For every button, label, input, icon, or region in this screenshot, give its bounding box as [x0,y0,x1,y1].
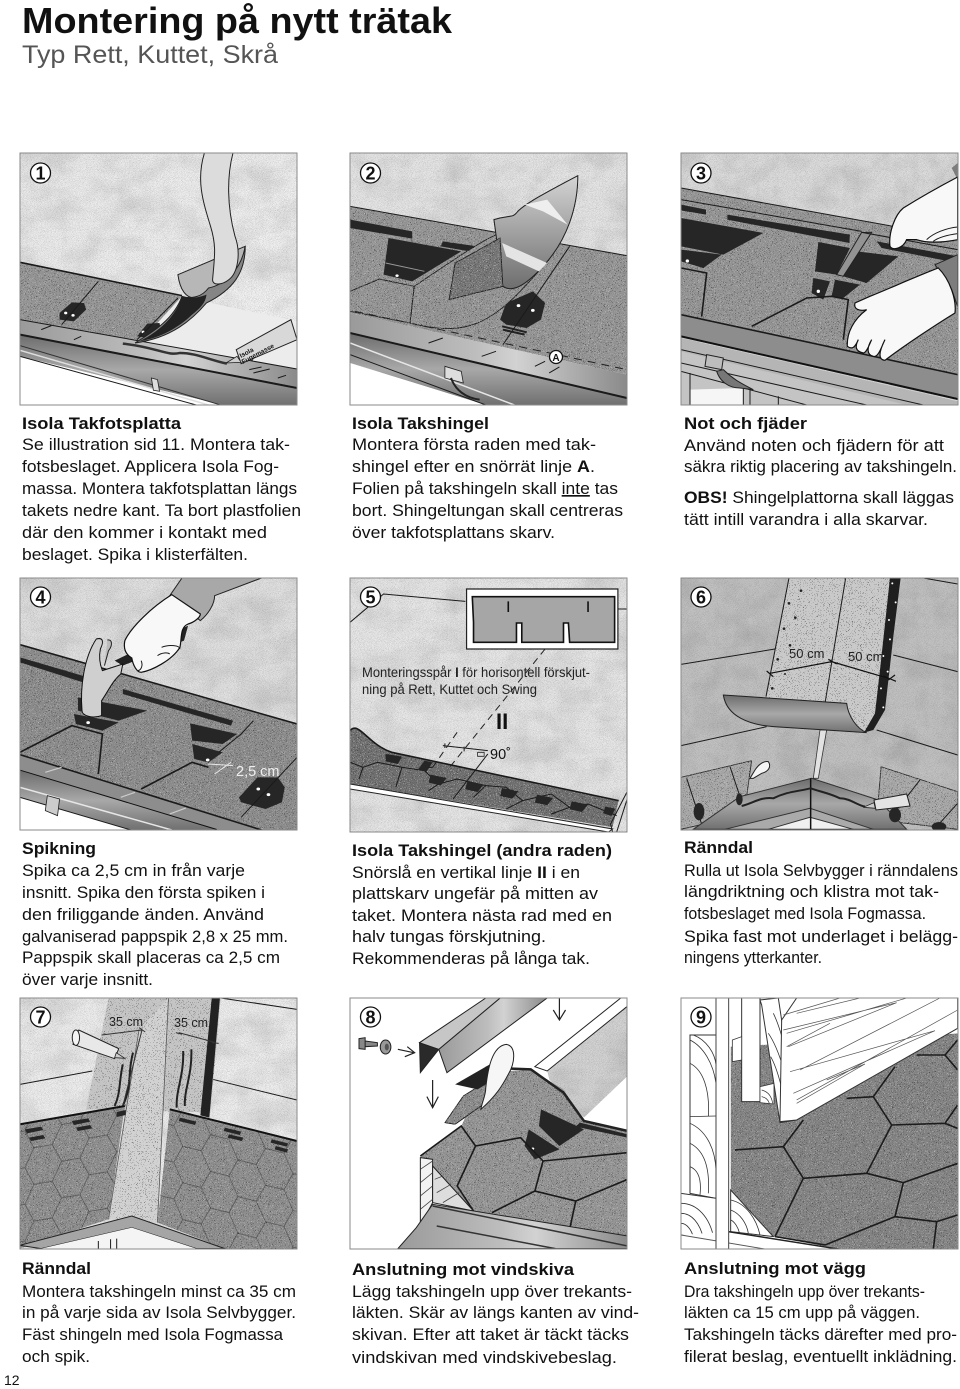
angle 90 degrees: 90˚ [490,747,511,763]
step number 5 [360,587,380,608]
chalk lines [433,649,545,771]
drip edge [20,320,297,388]
measurement: 50 cm right: 50 cm [848,649,883,664]
text: anslutning mot vindskiva: vindskivan med vindskivebeslag. [352,1348,617,1367]
lower shingles right [877,767,958,829]
hexagon shingles left [20,1106,125,1249]
wall plane and board [547,1006,628,1118]
eave flashing [693,778,907,829]
text: anslutning mot vägg: Dra takshingeln upp över trekants- [684,1282,925,1301]
hammer head [82,639,123,717]
step number 6: 6 [696,588,706,608]
text: anslutning mot vägg: Takshingeln täcks därefter med pro- [684,1325,957,1344]
text: anslutning mot vindskiva [352,1260,639,1367]
text: isola takfotsplatta: Se illustration sid 11. Montera tak- [22,435,290,454]
text: spikning: över varje insnitt. [22,970,153,989]
measure mark [208,762,233,774]
plastic film strip [201,153,238,284]
text: ränndal rulla ut: längdriktning och klistra mot tak- [684,882,939,901]
text: not och fjäder: säkra riktig placering av takshingeln. [684,457,957,476]
panel 7: ränndal shingel illustration [20,998,297,1249]
text: isola takfotsplatta: beslaget. Spika i klisterfälten. [22,545,248,564]
text: anslutning mot vindskiva: Anslutning mot vindskiva [352,1260,575,1279]
text: isola takfotsplatta: Isola Takfotsplatta [22,414,182,433]
lower hand [847,268,955,360]
text: ränndal rulla ut: Rulla ut Isola Selvbygger i ränndalens [684,861,958,880]
text: ränndal montera: och spik. [22,1347,90,1366]
text: isola takshingel: shingel efter en snörrät linje A. [352,457,595,476]
step number 9: 9 [696,1008,706,1028]
panel 1: isola takfotsplatta illustration: Isola [239,346,255,360]
valley [109,998,169,1223]
text: isola takfotsplatta [22,414,301,564]
text: spikning: insnitt. Spika den första spiken i [22,883,265,902]
gutter and wall [681,338,958,405]
sleeve [935,255,958,306]
arrows [398,998,566,1108]
text: isola takshingel [352,414,623,542]
screw and washer [359,1038,377,1049]
hammer handle [115,626,188,666]
panel 6: ränndal illustration [681,578,958,831]
half-pipe valley sheet [723,695,867,733]
tube of fogmassa [236,320,297,364]
text: anslutning mot vägg: läkten ca 15 cm upp på väggen. [684,1303,920,1322]
text: anslutning mot vindskiva: skivan. Efter att taket är täckt täcks [352,1325,629,1344]
text: isola takshingel andra raden [352,841,612,968]
panel 5: andra raden illustration [350,578,628,832]
text: isola takshingel: Montera första raden med tak- [352,435,596,454]
large plank [780,998,958,1122]
shingle tabs [694,803,704,820]
eave flashing [20,1216,225,1249]
step number 4: 4 [35,588,46,608]
roof shingles [20,645,297,830]
glue tube [73,1030,119,1059]
text: isola takshingel andra raden: Isola Takshingel (andra raden) [352,841,612,860]
panel 1: isola takfotsplatta illustration [20,153,297,405]
text: anslutning mot vägg [684,1259,957,1366]
text: isola takshingel: Isola Takshingel [352,414,489,433]
hexagon shingles right [157,1109,297,1249]
text: anslutning mot vindskiva: läkten. Skär av längs kanten av vind- [352,1303,639,1322]
measurement: 50 cm left: 50 cm [789,646,824,661]
slot marks on shingles [386,754,615,816]
panel 3: not och fjäder illustration [681,153,958,405]
step number 6 [691,587,711,608]
title [22,0,453,69]
text: isola takshingel: bort. Shingeltungan skall centreras [352,501,623,520]
step number 4 [30,587,50,608]
callout: monteringsspår: Monteringsspår I för horisontell förskjut- [362,664,590,680]
shingle body [420,1069,628,1249]
text: isola takshingel: över takfotsplattans skarv. [352,523,555,542]
lower shingles left [681,761,752,829]
shingle tab with knife hand [445,1079,490,1124]
text: ränndal montera: Ränndal [22,1259,91,1278]
curled plate [178,246,245,298]
measurement lines [767,659,896,681]
text: isola takshingel andra raden: plattskarv ungefär på mitten av [352,884,599,903]
exposed tab [500,291,545,328]
text: anslutning mot vindskiva: Lägg takshingeln upp över trekants- [352,1282,632,1301]
drip edge and gutter [350,313,627,400]
marker A: A [552,353,560,364]
text: ränndal rulla ut: fotsbeslaget med Isola Fogmassa. [684,904,926,923]
text: ränndal rulla ut: Ränndal [684,838,753,857]
step number 8 [360,1007,380,1028]
underlay strip [86,998,221,1113]
trowel [750,762,770,778]
bottom shingle rows [350,728,619,827]
drip edge and gutter [20,755,262,830]
text: anslutning mot vägg: Anslutning mot vägg [684,1259,866,1278]
vertical board [716,998,729,1250]
text: isola takshingel andra raden: Rekommenderas på långa tak. [352,949,590,968]
panel 1: isola takfotsplatta illustration: Fugemasse [241,343,276,366]
peeled shingle [410,176,578,329]
step number 1 [30,163,50,184]
drip edge [681,315,958,398]
corner wedge [731,1190,773,1237]
text: spikning: Spikning [22,839,96,858]
step number 5: 5 [365,588,376,608]
text: not och fjäder: tätt intill varandra i alla skarvar. [684,510,928,529]
step number 2: 2 [365,164,376,184]
text: isola takfotsplatta: där den kommer i kontakt med [22,523,267,542]
roof shingles [350,206,627,375]
eave edge [350,784,613,832]
flashing profile [439,998,547,1073]
subtitle: Typ Rett, Kuttet, Skrå [22,41,278,69]
glue tube [874,794,910,810]
text: isola takfotsplatta: fotsbeslaget. Applicera Isola Fog- [22,457,279,476]
text: isola takshingel andra raden: taket. Montera nästa rad med en [352,906,612,925]
text: ränndal montera: Montera takshingeln minst ca 35 cm [22,1282,296,1301]
callout: monteringsspår: ning på Rett, Kuttet och Swing [362,681,537,697]
text: isola takshingel andra raden: Snörslå en vertikal linje II i en [352,863,580,882]
panel 8: anslutning mot vindskiva illustration [350,998,628,1249]
upper hand [890,177,958,249]
panel 2: isola takshingel illustration [350,153,627,405]
black adhesive edge [864,578,901,733]
text: isola takfotsplatta: takets nedre kant. Ta bort plastfolien [22,501,301,520]
marker II: II [496,709,508,734]
bottom-left beam [681,1193,716,1240]
valley underlay [767,578,900,733]
step number 7: 7 [35,1008,46,1028]
step number 8: 8 [365,1008,376,1028]
step number 9 [691,1007,711,1028]
step number 3: 3 [696,164,706,184]
left wall studs with grain [690,1035,716,1198]
measurement: 35 cm right: 35 cm [174,1016,208,1030]
bottom white strip [681,1232,840,1249]
hex shingles [731,1033,958,1249]
glue bead [123,344,227,364]
text: ränndal rulla ut [684,838,958,967]
shingle strip [20,262,182,343]
cut hatch wood [420,1158,433,1226]
hand [124,595,200,672]
sleeve [170,578,262,621]
roof shingles [681,188,958,375]
text: ränndal montera [22,1259,296,1366]
text: not och fjäder: Använd noten och fjädern för att [684,436,944,455]
text: not och fjäder: Not och fjäder [684,414,808,433]
step number 7 [30,1007,50,1028]
vertical strip [742,998,760,1102]
text: ränndal montera: in på varje sida av Isola Selvbygger. [22,1303,296,1322]
text: ränndal rulla ut: ningens ytterkanter. [684,948,822,967]
text: isola takfotsplatta: massa. Montera takfotsplattan längs [22,479,297,498]
measurement: 35 cm left: 35 cm [109,1015,143,1029]
text: spikning: Spika ca 2,5 cm in från varje [22,861,245,880]
text: spikning: galvaniserad pappspik 2,8 x 25 mm. [22,927,288,946]
step number 1: 1 [35,164,46,184]
gutter metal [398,1204,628,1249]
callout: monteringsspår [362,664,590,697]
panel 4: spikning illustration [20,578,297,830]
text: ränndal montera: Fäst shingeln med Isola Fogmassa [22,1325,284,1344]
marker A [550,350,562,364]
measure lines [102,1028,219,1106]
text: spikning: den friliggande änden. Använd [22,905,264,924]
text: not och fjäder [684,414,957,529]
title: Montering på nytt trätak [22,0,453,41]
text: not och fjäder: OBS! Shingelplattorna skall läggas [684,488,954,507]
glue beads [742,788,865,807]
glue lines [115,1049,191,1108]
text: spikning [22,839,288,989]
step number 2 [360,163,380,184]
inset shingle diagram [467,589,618,649]
exposed tab [239,777,285,809]
text: anslutning mot vägg: filerat beslag, eventuellt inklädning. [684,1347,957,1366]
step number 3 [691,163,711,184]
panel 9: anslutning mot vägg illustration [681,998,958,1250]
text: isola takshingel: Folien på takshingeln skall inte tas [352,479,618,498]
measurement: 2,5 cm: 2,5 cm [236,764,280,780]
text: ränndal rulla ut: Spika fast mot underlaget i belägg- [684,927,958,946]
text: spikning: Pappspik skall placeras ca 2,5 cm [22,948,280,967]
page number: 12 [4,1372,20,1388]
text: isola takshingel andra raden: halv tungas förskjutning. [352,927,546,946]
